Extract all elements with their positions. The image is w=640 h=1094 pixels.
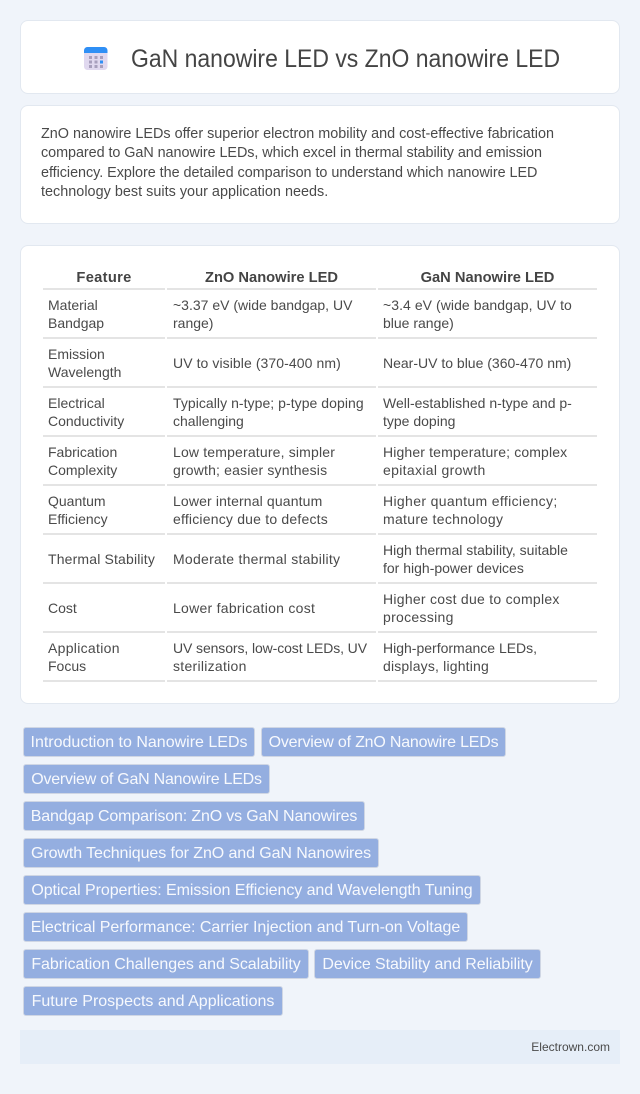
row: thermal stability: High thermal stability, suitable xyxy=(383,542,568,558)
icon: calendar xyxy=(84,47,108,70)
row: material bandgap: Material xyxy=(48,297,98,313)
tag: Fabrication Challenges and Scalability xyxy=(31,956,301,973)
tag xyxy=(314,949,541,979)
row: quantum efficiency xyxy=(48,493,558,527)
row: material bandgap: range) xyxy=(173,315,213,331)
row: thermal stability: Moderate thermal stability xyxy=(173,551,340,567)
row: emission wavelength xyxy=(48,346,571,380)
row: fabrication complexity: Higher temperature; complex xyxy=(383,444,567,460)
tag: Future Prospects and Applications xyxy=(32,993,274,1010)
row: electrical conductivity: Conductivity xyxy=(48,413,124,429)
row: thermal stability: Thermal Stability xyxy=(48,551,155,567)
row: application focus: UV sensors, low-cost LEDs, UV xyxy=(173,640,367,656)
row: quantum efficiency: Lower internal quantum xyxy=(173,493,322,509)
row: thermal stability xyxy=(48,542,568,576)
tag xyxy=(23,727,255,757)
tag: Introduction to Nanowire LEDs xyxy=(30,734,248,751)
row: cost: Higher cost due to complex xyxy=(383,591,560,607)
row: application focus: High-performance LEDs, xyxy=(383,640,537,656)
row: electrical conductivity: Typically n-type; p-type doping xyxy=(173,395,364,411)
row: quantum efficiency: Higher quantum efficiency; xyxy=(383,493,558,509)
row: application focus: Focus xyxy=(48,658,86,674)
tag xyxy=(23,801,365,831)
row: quantum efficiency: Efficiency xyxy=(48,511,108,527)
tag: Overview of GaN Nanowire LEDs xyxy=(31,771,262,788)
row: material bandgap xyxy=(48,297,572,331)
row: fabrication complexity: growth; easier synthesis xyxy=(173,462,327,478)
row: fabrication complexity: Low temperature, simpler xyxy=(173,444,335,460)
intro text: efficiency. Explore the detailed comparison to understand which nanowire LED xyxy=(41,165,537,181)
row: electrical conductivity: Electrical xyxy=(48,395,105,411)
tag: Overview of ZnO Nanowire LEDs xyxy=(269,734,498,751)
row: quantum efficiency: Quantum xyxy=(48,493,106,509)
row: electrical conductivity: challenging xyxy=(173,413,244,429)
intro text: compared to GaN nanowire LEDs, which excel in thermal stability and emission xyxy=(41,145,542,161)
row: emission wavelength: Emission xyxy=(48,346,105,362)
intro text xyxy=(41,126,554,200)
row: electrical conductivity xyxy=(48,395,572,429)
row: fabrication complexity xyxy=(48,444,567,478)
panel: comparison table xyxy=(20,245,620,704)
tag: Growth Techniques for ZnO and GaN Nanowires xyxy=(31,845,371,862)
panel: intro xyxy=(20,105,620,224)
table header: feature: Feature xyxy=(76,270,132,286)
row: cost: processing xyxy=(383,609,454,625)
row: material bandgap: blue range) xyxy=(383,315,454,331)
row: emission wavelength: Wavelength xyxy=(48,364,121,380)
row: quantum efficiency: mature technology xyxy=(383,511,503,527)
tag xyxy=(23,838,379,868)
row: thermal stability: for high-power devices xyxy=(383,560,524,576)
row: fabrication complexity: epitaxial growth xyxy=(383,462,486,478)
table header: GaN: GaN Nanowire LED xyxy=(421,270,554,286)
intro text: technology best suits your application needs. xyxy=(41,184,328,200)
row: material bandgap: ~3.37 eV (wide bandgap, UV xyxy=(173,297,352,313)
row: emission wavelength: UV to visible (370-400 nm) xyxy=(173,355,341,371)
row: application focus: sterilization xyxy=(173,658,247,674)
row: fabrication complexity: Complexity xyxy=(48,462,117,478)
row: emission wavelength: Near-UV to blue (360-470 nm) xyxy=(383,355,571,371)
tag: Electrical Performance: Carrier Injection and Turn-on Voltage xyxy=(31,919,460,936)
row: application focus: Application xyxy=(48,640,120,656)
intro text: ZnO nanowire LEDs offer superior electron mobility and cost-effective fabrication xyxy=(41,126,554,142)
panel: title header xyxy=(20,20,620,94)
tag: Device Stability and Reliability xyxy=(322,956,533,973)
table header: ZnO: ZnO Nanowire LED xyxy=(205,270,338,286)
row: fabrication complexity: Fabrication xyxy=(48,444,117,460)
row: cost: Cost xyxy=(48,600,77,616)
comparison table xyxy=(43,270,597,682)
row: quantum efficiency: efficiency due to defects xyxy=(173,511,328,527)
footer: Electrown.com xyxy=(531,1040,610,1054)
row: application focus: displays, lighting xyxy=(383,658,489,674)
tag xyxy=(23,949,309,979)
row: cost xyxy=(48,591,560,625)
title: GaN nanowire LED vs ZnO nanowire LED xyxy=(131,45,560,73)
tag: Bandgap Comparison: ZnO vs GaN Nanowires xyxy=(31,808,357,825)
row: material bandgap: ~3.4 eV (wide bandgap, UV to xyxy=(383,297,572,313)
tag xyxy=(23,875,481,905)
row: electrical conductivity: Well-established n-type and p- xyxy=(383,395,572,411)
footer xyxy=(20,1030,620,1064)
tag: Optical Properties: Emission Efficiency and Wavelength Tuning xyxy=(31,882,473,899)
tag xyxy=(23,764,270,794)
row: cost: Lower fabrication cost xyxy=(173,600,315,616)
tag xyxy=(23,986,283,1016)
tag xyxy=(261,727,506,757)
row: electrical conductivity: type doping xyxy=(383,413,455,429)
row: material bandgap: Bandgap xyxy=(48,315,104,331)
tag xyxy=(23,912,468,942)
row: application focus xyxy=(48,640,537,674)
topic tags xyxy=(23,727,541,1016)
